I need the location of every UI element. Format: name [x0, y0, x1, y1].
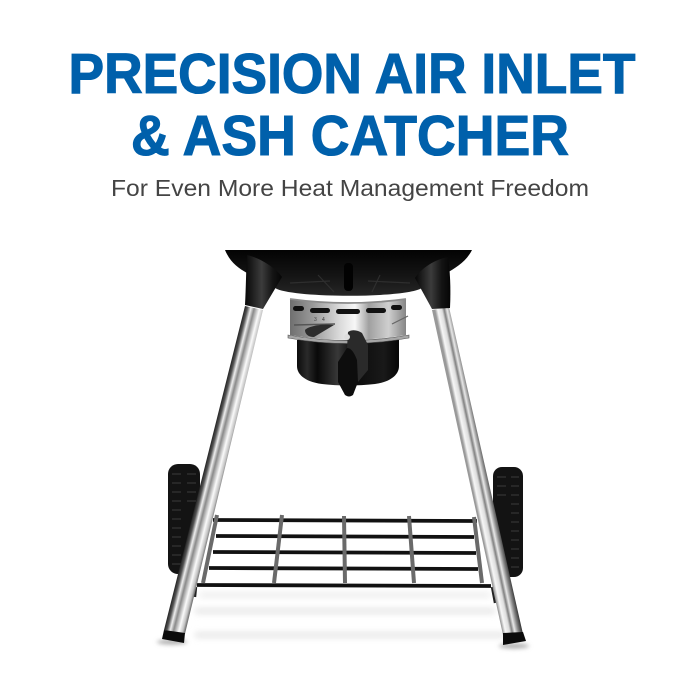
wire shelf [195, 515, 495, 603]
title: PRECISION AIR INLET [68, 42, 636, 106]
left leg [162, 255, 282, 643]
right leg [415, 257, 526, 645]
ash catcher handle [338, 330, 368, 396]
title [68, 42, 636, 168]
left wheel [168, 464, 200, 574]
air inlet ring: 4 [322, 317, 325, 323]
title: & ASH CATCHER [131, 104, 569, 168]
ash catcher cup [297, 340, 399, 386]
right wheel [493, 467, 523, 577]
air inlet ring: 3 [314, 317, 317, 323]
ground shadows [157, 593, 529, 648]
air inlet ring [288, 299, 409, 344]
grill illustration [157, 250, 529, 648]
subtitle: For Even More Heat Management Freedom [111, 175, 589, 201]
bowl underside [225, 250, 472, 296]
